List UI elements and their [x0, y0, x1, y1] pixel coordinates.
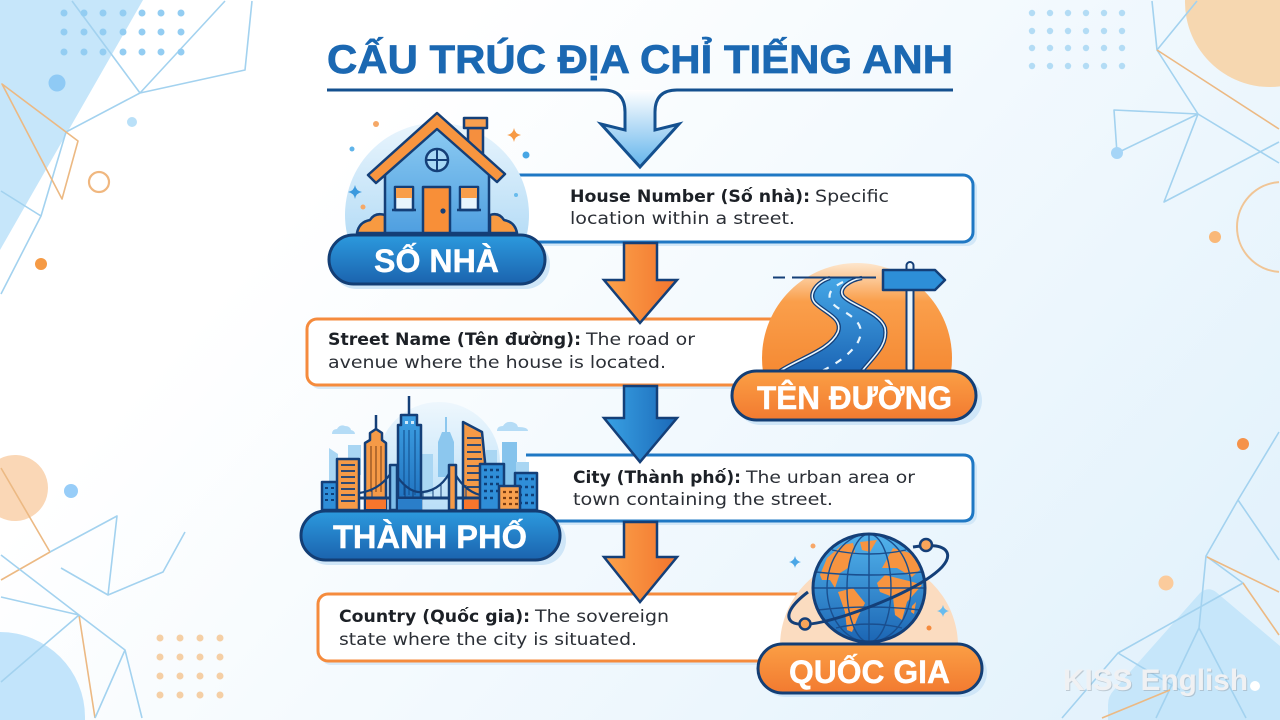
text: country description: The sovereign — [534, 607, 669, 627]
watermark: KISS English: KISS English — [1063, 664, 1248, 697]
panel: country — [318, 594, 808, 665]
text: street name description: Street Name (Tên đường): — [328, 330, 581, 350]
text: country description: Country (Quốc gia): — [339, 606, 530, 627]
title: CẤU TRÚC ĐỊA CHỈ TIẾNG ANH — [327, 36, 953, 82]
text: house number description — [570, 186, 889, 229]
icon: house — [345, 113, 530, 240]
text: house number description: House Number (Số nhà): — [570, 186, 810, 207]
text: house number description: location within a street. — [570, 209, 795, 229]
text: street name description: The road or — [585, 330, 695, 350]
arrow: blue step 2 to 3 — [604, 386, 677, 462]
pill: TÊN ĐƯỜNG: TÊN ĐƯỜNG — [757, 380, 952, 416]
pill: SỐ NHÀ: SỐ NHÀ — [374, 243, 499, 279]
arrow: title underline flowing into first step — [327, 90, 953, 167]
panel: house number — [510, 175, 977, 246]
text: street name description — [328, 330, 695, 373]
text: country description: state where the city is situated. — [339, 630, 637, 650]
pill: TÊN ĐƯỜNG — [732, 371, 982, 425]
icon: city skyline with bridge — [322, 396, 537, 512]
text: country description — [339, 606, 669, 650]
text: house number description: Specific — [815, 187, 889, 207]
panel: city — [526, 455, 977, 525]
panel: street name — [307, 319, 787, 389]
text: city description: town containing the street. — [573, 490, 833, 510]
watermark: KISS English: KISS English — [1064, 665, 1249, 698]
pill: THÀNH PHỐ — [301, 511, 566, 565]
icon: winding road and signpost — [762, 262, 952, 372]
text: street name description: avenue where the house is located. — [328, 353, 666, 373]
text: city description — [573, 467, 915, 510]
text: city description: The urban area or — [745, 468, 915, 488]
pill: QUỐC GIA: QUỐC GIA — [789, 654, 950, 690]
pill: QUỐC GIA — [758, 644, 987, 697]
text: city description: City (Thành phố): — [573, 467, 741, 488]
icon: globe with orbit — [780, 534, 958, 660]
pill: THÀNH PHỐ: THÀNH PHỐ — [333, 519, 527, 555]
arrow: orange step 3 to 4 — [604, 522, 677, 602]
pill: SỐ NHÀ — [329, 235, 550, 289]
arrow: orange step 1 to 2 — [604, 243, 677, 323]
